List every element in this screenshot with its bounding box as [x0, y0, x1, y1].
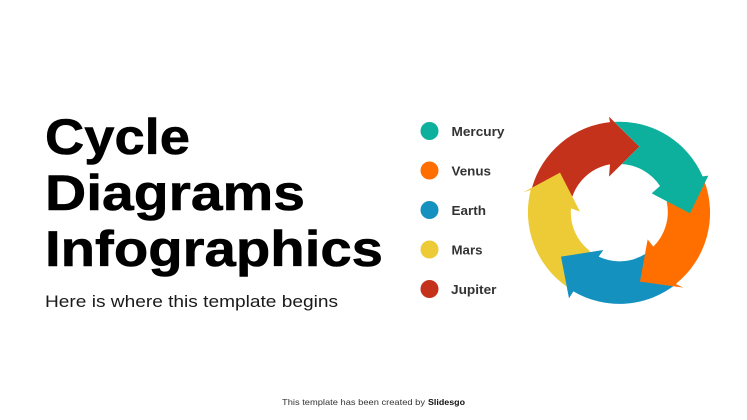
legend item: Venus: Venus [452, 164, 491, 178]
legend item: Earth [420, 201, 486, 219]
legend item: Venus [420, 162, 491, 180]
arrow: Earth [561, 250, 677, 304]
cycle diagram [523, 117, 710, 304]
legend item: Mercury [420, 122, 505, 140]
title: Infographics [45, 221, 383, 277]
arrow: Venus [640, 181, 710, 288]
legend item: Mars [420, 240, 482, 258]
legend item: Mercury: Mercury [452, 124, 505, 139]
title: Cycle [45, 109, 190, 165]
arrow: Jupiter [532, 117, 639, 197]
subtitle: Here is where this template begins [45, 292, 338, 311]
legend [420, 122, 505, 298]
title: Diagrams [45, 165, 305, 221]
legend item: Earth: Earth [452, 203, 486, 218]
legend item: Mars: Mars [452, 242, 482, 258]
legend item: Jupiter: Jupiter [451, 282, 496, 297]
arrow: Mercury [614, 122, 708, 213]
legend item: Jupiter [420, 280, 496, 298]
footer credit: This template has been created by [282, 397, 426, 407]
footer credit: Slidesgo [428, 397, 465, 407]
arrow: Mars [523, 173, 597, 287]
title [45, 109, 383, 277]
